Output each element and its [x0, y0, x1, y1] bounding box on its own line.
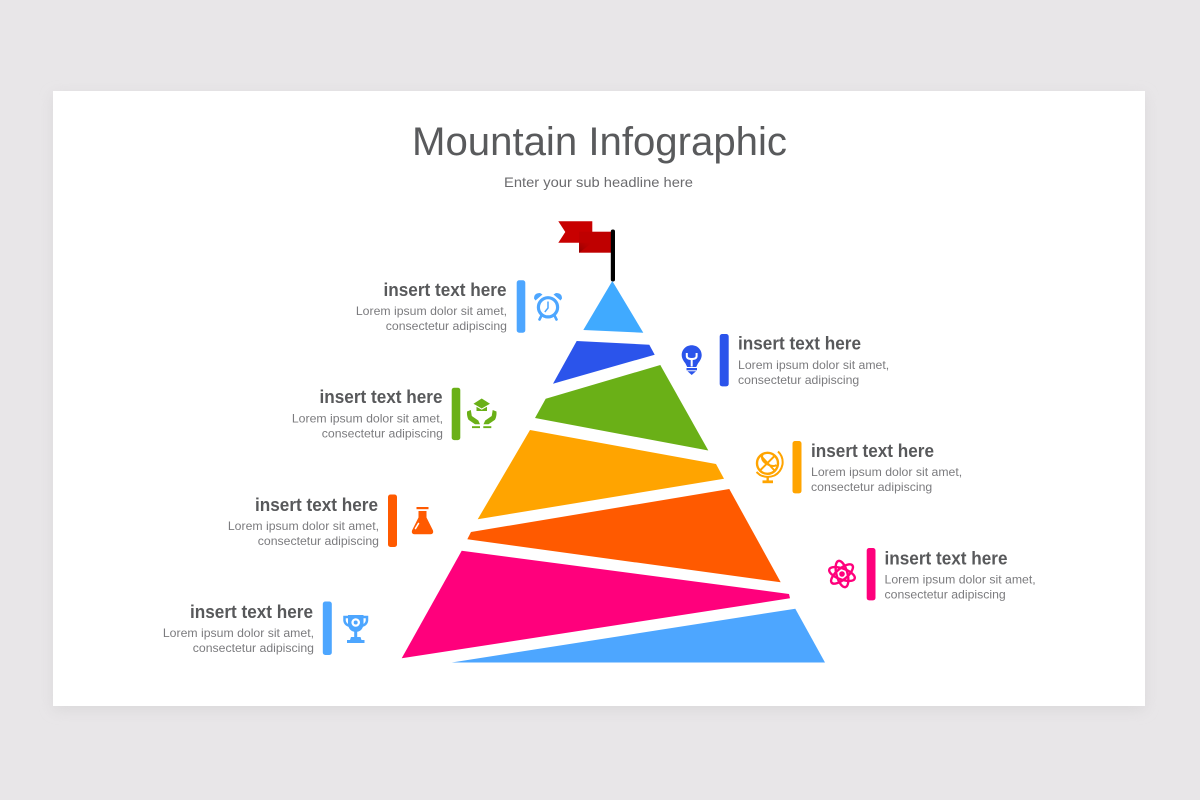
callout: flask item: [228, 494, 433, 548]
icon: summit flag: [558, 221, 615, 282]
body text: Lorem ipsum dolor sit amet,: [163, 626, 314, 640]
heading: insert text here: [255, 495, 378, 515]
layer 4: [478, 430, 724, 519]
body text: consectetur adipiscing: [811, 480, 932, 494]
body text: consectetur adipiscing: [738, 373, 859, 387]
icon: alarm clock: [534, 293, 562, 320]
heading: insert text here: [320, 387, 442, 407]
body text: consectetur adipiscing: [258, 534, 379, 548]
body text: Lorem ipsum dolor sit amet,: [738, 358, 889, 372]
icon: light bulb: [682, 345, 702, 375]
body text: Lorem ipsum dolor sit amet,: [356, 304, 507, 318]
body text: consectetur adipiscing: [193, 641, 314, 655]
heading: insert text here: [384, 280, 506, 300]
subtitle: Enter your sub headline here: [504, 174, 693, 190]
body text: Lorem ipsum dolor sit amet,: [811, 465, 962, 479]
layer 7: base: [452, 609, 825, 662]
body text: consectetur adipiscing: [884, 588, 1006, 602]
layer 6: [402, 551, 790, 658]
icon: graduation cap in hands: [467, 398, 497, 428]
heading: insert text here: [190, 602, 313, 622]
accent bar: [867, 548, 876, 600]
icon: flask: [412, 507, 433, 534]
accent bar: [388, 494, 397, 547]
callout: atom item: [827, 548, 1036, 602]
body text: consectetur adipiscing: [386, 319, 507, 333]
accent bar: [452, 388, 460, 440]
mountain pyramid: [402, 281, 825, 662]
heading: insert text here: [811, 441, 934, 461]
body text: Lorem ipsum dolor sit amet,: [228, 519, 379, 533]
layer 1: peak: [583, 281, 643, 333]
layer 2: [553, 341, 655, 384]
accent bar: [720, 334, 729, 386]
heading: insert text here: [738, 334, 861, 354]
callout: graduation item: [292, 387, 497, 440]
layer 5: [467, 489, 781, 582]
icon: globe: [756, 452, 783, 482]
layer 3: [535, 365, 708, 450]
callout: globe item: [756, 441, 962, 494]
heading: insert text here: [884, 548, 1008, 568]
accent bar: [792, 441, 802, 493]
callout: alarm clock item: [356, 280, 562, 333]
accent bar: [323, 602, 332, 655]
accent bar: [517, 280, 525, 333]
callout: light bulb item: [682, 334, 889, 387]
body text: consectetur adipiscing: [322, 426, 443, 440]
body text: Lorem ipsum dolor sit amet,: [292, 412, 443, 426]
body text: Lorem ipsum dolor sit amet,: [884, 572, 1036, 586]
callout: trophy item: [163, 602, 367, 655]
title: Mountain Infographic: [412, 120, 787, 164]
icon: trophy: [344, 615, 367, 643]
panel: white slide card: [53, 91, 1145, 706]
icon: atom: [827, 560, 857, 588]
